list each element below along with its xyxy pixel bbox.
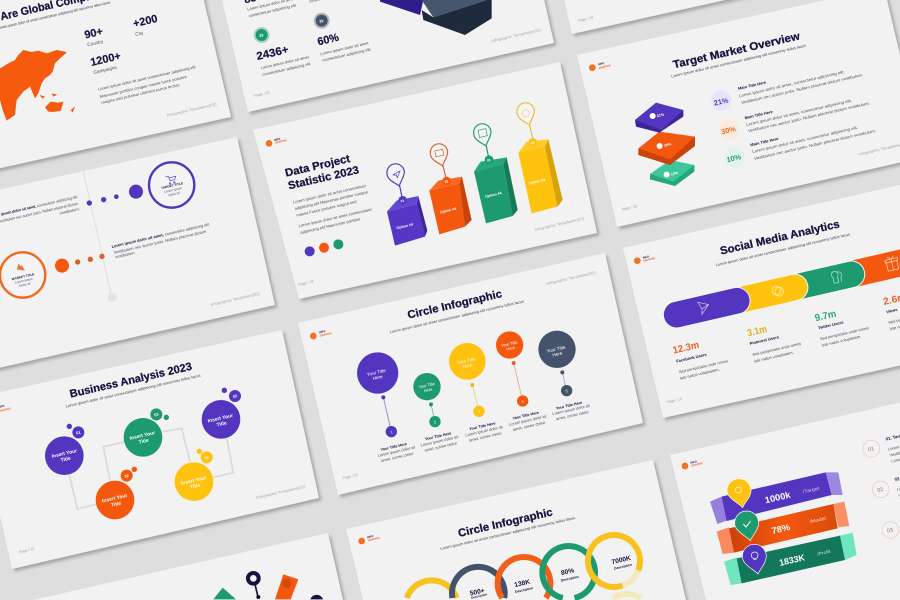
body text: Lorem ipsum dolor sit amet consectetuer [292, 183, 367, 205]
slide: top right fragment [532, 0, 879, 34]
band segment: green [784, 258, 867, 302]
stat text top: consectetuer adipiscing elit [248, 2, 297, 18]
stat: 60% [316, 32, 372, 63]
node 03: 03 [154, 411, 160, 417]
numbered item 01: 01 [868, 446, 875, 453]
stat: 138K [514, 579, 533, 594]
logo: INFO [274, 137, 281, 142]
lollipop 5: 5 [565, 388, 569, 394]
pin: orange: 02 [444, 179, 449, 184]
stat: 500+: Description [471, 592, 488, 600]
page number: Page / 16 [621, 204, 637, 212]
text block 3: Vestibulum nec auctor justo. Nullam placerat dictum vestibulum. [753, 128, 876, 161]
body text: Lorem ipsum dolor sit amet consectetuer [298, 206, 373, 228]
ring: yellow right [588, 535, 640, 587]
pin: navy [246, 571, 261, 599]
bar: green option [474, 157, 518, 223]
stat: views: Views [886, 307, 899, 314]
ribbon: orange [717, 502, 849, 554]
text block: Maecenas porttitor congue massa fusce posuere [99, 74, 188, 99]
text block upper: vestibulum. [59, 206, 80, 216]
slide: social media analytics [623, 178, 900, 418]
lollipop 2: Here [423, 386, 434, 393]
numbered item 03 [882, 522, 899, 538]
caption 4: Your Title Here [512, 411, 539, 421]
lollipop 4 [496, 331, 528, 407]
stat: 138K: Description [515, 586, 533, 594]
heading: data project statistic 2023: Data Project [284, 153, 352, 180]
stat: 90+ country: 90+ [83, 26, 104, 42]
lollipop 5: Your Title [546, 345, 566, 354]
stat: 80% [560, 567, 579, 583]
percent bubble 21% [711, 90, 732, 111]
pin: purple: 01 [400, 199, 405, 203]
caption 1 [377, 442, 416, 463]
logo [310, 329, 332, 339]
lollipop 4: 4 [521, 398, 525, 404]
ribbon: purple [710, 472, 843, 524]
caption 4: Lorem ipsum dolor sit [508, 413, 548, 427]
ring: green [542, 546, 595, 598]
heading: business analysis 2023: Business Analysis 2023 [69, 361, 193, 401]
ribbon: green [724, 533, 857, 585]
icon: paper plane [698, 300, 710, 315]
node 05: 05 [232, 393, 238, 399]
stat: twitter users [814, 309, 869, 348]
lollipop 3: Your Title [456, 356, 477, 365]
logo: INFO [642, 254, 649, 260]
ring: pale yellow [613, 594, 641, 598]
node 01 [45, 424, 84, 475]
lollipop 1: Here [372, 374, 384, 381]
body text [292, 183, 373, 235]
logo [358, 534, 380, 544]
slide: circle infographic rings [346, 460, 686, 600]
footer: Infographic Templates(02) [210, 291, 261, 307]
ring: orange [498, 557, 550, 598]
logo: GRAPHIC [643, 256, 656, 263]
node 03 [124, 408, 169, 457]
icon: slate badge: 29 [319, 19, 324, 24]
footer: Infographic Templates(02) [256, 484, 307, 500]
text block lower: Vestibulum nec auctor justo. Nullam placerat dictum [113, 229, 207, 255]
iso layer: green [650, 160, 694, 186]
stat: 90+ country: Country [87, 39, 104, 47]
icon: gift [884, 255, 900, 271]
stat: twitter users: Sed perspiciatis unde omnis [819, 325, 869, 341]
ribbon: purple: /Target [802, 485, 821, 494]
percent bubble 30%: 30% [720, 124, 737, 136]
text block 2: Vestibulum nec auctor justo. Nullam placerat dictum vestibulum. [747, 100, 870, 133]
lollipop 5: Here [552, 351, 563, 358]
logo: INFO [367, 534, 374, 539]
node 04: Title [189, 483, 201, 491]
target ring: TARGET TITLE [161, 181, 183, 190]
heading: circle infographic: Circle Infographic [457, 506, 554, 540]
slide: ribbons with pins [670, 385, 900, 600]
text block lower: vestibulum. [115, 250, 136, 259]
iso layer: orange: 30% [664, 142, 673, 148]
ring: yellow left [407, 580, 457, 598]
icon: people [831, 270, 843, 284]
logo [266, 137, 287, 147]
pin: yellow: 04 [531, 141, 535, 145]
logo [589, 61, 611, 71]
segmented band [661, 233, 900, 331]
target ring [149, 162, 194, 208]
text block [97, 64, 197, 105]
stat: 60%: Lorem ipsum dolor sit amet [320, 40, 370, 56]
numbered item 01 [863, 432, 900, 464]
diamond: green [213, 588, 236, 599]
bar: orange [275, 574, 298, 599]
percent bubble 30% [719, 119, 739, 140]
node 05 [202, 388, 241, 439]
stat: facebook users: iste natus voluptatem. [679, 367, 720, 381]
band segment: yellow [722, 271, 811, 316]
pin: green: 03 [487, 158, 491, 163]
stat: twitter users: Twitter Users [817, 319, 845, 330]
logo: GRAPHIC [274, 138, 287, 145]
stat: facebook users [672, 340, 728, 381]
numbered item 02: 02 [877, 487, 884, 494]
lollipop 3: Here [462, 362, 474, 369]
stat: pinterest users [746, 324, 802, 364]
node 02: Title [110, 501, 122, 509]
page number: Page / 14 [577, 16, 593, 23]
pin: yellow [517, 103, 537, 147]
slide: global company world map [0, 0, 231, 185]
footer: Infographic Templates(02) [534, 216, 585, 232]
caption 3: Lorem ipsum dolor sit [465, 424, 504, 438]
ribbon: green: 1833K [778, 552, 806, 568]
caption 1: Your Title Here [380, 442, 407, 452]
stat: facebook users: Sed perspiciatis unde omnis [678, 358, 728, 374]
caption 5 [552, 401, 591, 421]
icon: slate badge [314, 13, 330, 29]
logo [634, 254, 656, 264]
caption 2: Lorem ipsum dolor sit [420, 434, 459, 448]
stat: pinterest users: iste natus voluptatem. [753, 350, 794, 364]
lollipop 3 [449, 343, 486, 417]
stat: facebook users: 12.3m [672, 340, 700, 357]
stat: 1200+ campaigns: 1200+ [89, 50, 122, 69]
icon: green badge [254, 27, 270, 43]
market ring: Dolor sit [19, 281, 31, 288]
node 02: Insert Your [102, 493, 128, 505]
lollipop 4: Your Title [501, 339, 519, 348]
iso layer: green: 10% [670, 171, 679, 176]
small icon circles [305, 239, 343, 256]
stat: 2436+ [255, 44, 312, 77]
orange connector dots [55, 254, 105, 273]
iso layer: purple [635, 103, 683, 133]
stat: 60%: consectetuer adipiscing elit [322, 46, 372, 63]
caption 3: amet, conse ctetur [469, 430, 503, 443]
target ring: Dolor sit [168, 191, 180, 197]
stat: pinterest users: Sed perspiciatis unde omnis [752, 341, 802, 357]
pin: purple [742, 544, 766, 574]
node 01: Title [60, 456, 72, 464]
stat: pinterest users: 3.1m [746, 324, 768, 339]
market ring: MARKET TITLE [11, 272, 35, 281]
stat: 7000K [611, 555, 632, 571]
caption 5: Lorem ipsum dolor sit [552, 403, 591, 416]
subtitle: Lorem ipsum dolor sit amet consectetuer adipiscing elit nonummy tellus lacus [715, 232, 850, 267]
iso layer: orange [638, 132, 695, 165]
caption 2: Your Title Here [425, 431, 452, 441]
subtitle: Lorem ipsum dolor sit amet consectetuer adipiscing elit nonummy tellus lacus [671, 44, 807, 79]
caption 3 [465, 421, 504, 443]
stat: pinterest users: Pinterest Users [749, 334, 780, 346]
node 05: Insert Your [207, 413, 234, 425]
icon: green badge: 29 [259, 33, 264, 38]
node 01: 01 [76, 429, 82, 435]
pin: yellow [727, 479, 751, 508]
subtitle: Lorem ipsum dolor sit amet consectetuer adipiscing elit nonummy tellus lacus [389, 299, 524, 334]
percent bubble 21%: 21% [713, 95, 730, 108]
world map [0, 50, 75, 121]
caption 4 [508, 411, 548, 432]
subtitle: Lorem ipsum dolor sit amet consectetuer adipiscing elit nonummy tellus lacus [440, 516, 576, 551]
market ring: Lorem ipsum [14, 277, 33, 285]
text block 3: Main Title Here [750, 136, 780, 147]
stat: 7000K: Description [614, 563, 632, 571]
stat: 138K: 138K [514, 579, 531, 589]
bar: yellow option [518, 139, 563, 213]
bar: purple option [387, 196, 427, 246]
body text: massa Fusce posuere magna sed [296, 199, 357, 218]
pin: orange [430, 144, 451, 185]
logo: GRAPHIC [319, 331, 332, 338]
body text: adipiscing elit Maecenas porttitor congue [294, 189, 369, 211]
text block: magna sed pulvinar ultricies purus lectus [101, 82, 180, 105]
connector lines [69, 428, 233, 509]
text block 1: Vestibulum nec auctor justo. Nullam placerat dictum vestibulum. [741, 72, 864, 105]
slide: bottom left fragment [33, 533, 343, 600]
page number: Page / 18 [298, 280, 314, 287]
pin: green [735, 511, 759, 541]
stat: twitter users: 9.7m [814, 309, 838, 324]
ring: slate [452, 567, 505, 598]
timeline axis [83, 172, 117, 302]
caption 4: amet, conse ctetur [512, 420, 546, 432]
footer: Infographic Templates(02) [491, 28, 542, 43]
text block 2: Lorem ipsum dolor sit amet, consectetur adipiscing elit. [746, 98, 852, 127]
text block 3: Lorem ipsum dolor sit amet, consectetur adipiscing elit. [752, 125, 858, 154]
ribbon: purple: 1000k [764, 490, 791, 505]
slide: target market overview [577, 0, 900, 227]
stat: twitter users: iste natus voluptatem. [821, 334, 862, 348]
node 02 [96, 467, 137, 519]
lollipop 1: Your Title [366, 368, 387, 377]
stat: 80%: Description [560, 575, 579, 583]
caption 2 [420, 431, 459, 453]
text block lower: Lorem ipsum dolor sit amet, consectetur adipiscing elit [111, 221, 211, 249]
slide: top centre statistics [208, 0, 554, 112]
stat: 2436+: consectetuer adipiscing elit [262, 61, 312, 77]
caption 2: amet, conse ctetur [424, 440, 458, 453]
numbered item 02 [872, 473, 900, 498]
logo: INFO [598, 61, 605, 66]
lollipop 2: Your Title [418, 381, 436, 389]
bar: purple option: Option #4 [396, 222, 414, 230]
pin: purple [387, 164, 407, 205]
bar: green option: Option #4 [485, 191, 503, 199]
logo fragment [0, 404, 11, 413]
text block 2: Main Title Here [744, 109, 774, 120]
page number: Page / 12 [19, 547, 35, 554]
iso layer: purple: 21% [656, 112, 665, 118]
page number: Page / 16 [342, 473, 358, 480]
logo: GRAPHIC [367, 536, 380, 542]
footer: Infographic Templates(02) [546, 270, 597, 286]
lollipop 1 [357, 352, 398, 437]
stat: views [882, 292, 900, 331]
target ring: Lorem ipsum [164, 186, 183, 194]
caption 5: Your Title Here [556, 401, 583, 411]
pin: green [474, 124, 493, 164]
text block 1: Lorem ipsum dolor sit amet, consectetur adipiscing elit. [738, 69, 845, 98]
logo: INFO [319, 329, 326, 334]
3D block stack [380, 0, 492, 35]
bar: orange option: Option #4 [439, 207, 458, 215]
bar: yellow option: Option #4 [528, 178, 547, 186]
page number: Page / 14 [666, 397, 682, 404]
purple connector dots [87, 185, 143, 206]
lollipop 5 [538, 331, 576, 396]
lollipop 3: 3 [477, 409, 481, 414]
node 04: 04 [204, 454, 210, 460]
percent bubble 10% [724, 147, 745, 168]
body text: adipiscing elit Maecenas porttitor [300, 216, 362, 235]
node 01: Insert Your [51, 448, 78, 460]
heading: data project statistic 2023: Statistic 2023 [287, 164, 360, 192]
lollipop 2 [413, 373, 441, 427]
ribbon: orange: /Model [809, 516, 826, 524]
caption 1: Lorem ipsum dolor sit [377, 444, 416, 458]
node 04 [175, 449, 213, 501]
numbered item 03: 03 [887, 527, 894, 535]
stat: 2436+: 2436+ [255, 44, 290, 63]
stat: 500+: 500+ [469, 587, 486, 598]
lollipop 2: 2 [433, 419, 437, 425]
text block upper: Vestibulum nec auctor justo. Nullam placerat dictum [0, 201, 79, 224]
slide: circle infographic lollipops [298, 253, 643, 495]
subtitle: Lorem ipsum dolor sit amet consectetuer adipiscing elit nonummy tellus lacus [65, 374, 201, 409]
slide: timeline with target and market circles [0, 137, 275, 375]
band segment: purple [661, 285, 753, 331]
stat: 7000K: 7000K [611, 555, 632, 566]
caption 1: amet, conse ctetur [381, 451, 415, 463]
text block: Lorem ipsum dolor sit amet consectetuer adipiscing elit [97, 64, 197, 92]
logo: GRAPHIC [691, 461, 704, 468]
heading: data project statistic 2023 [284, 153, 360, 192]
ribbon: orange: 78% [771, 522, 791, 536]
stat: 1200+ campaigns: Campaigns [93, 65, 118, 75]
node 03: Title [138, 438, 150, 446]
node 02: 02 [124, 473, 130, 479]
slide: data project statistic [253, 62, 597, 299]
stat: 80%: 80% [560, 567, 575, 577]
logo: GRAPHIC [598, 63, 611, 70]
heading: circle infographic: Circle Infographic [406, 288, 503, 322]
bar: orange option [429, 177, 472, 234]
icon: circles [771, 285, 784, 297]
stat: 2436+: Lorem ipsum dolor sit amet [260, 54, 310, 70]
heading: social media analytics: Social Media Analytics [719, 218, 841, 258]
node 05: Title [216, 420, 228, 428]
lollipop 1: 1 [390, 429, 394, 435]
stat: 60%: 60% [316, 32, 340, 48]
footer: Infographic Templates(02) [167, 102, 218, 118]
stat: +200 city: +200 [132, 13, 159, 30]
percent bubble 10%: 10% [726, 152, 742, 164]
logo [682, 459, 704, 469]
ribbon: green: /Profit [817, 549, 832, 557]
stat: facebook users: Facebook Users [676, 352, 708, 364]
market ring [0, 252, 45, 298]
caption 3: Your Title Here [469, 421, 496, 431]
lollipop 4: Here [506, 345, 516, 352]
logo: INFO [690, 459, 697, 465]
band segment: orange [843, 233, 900, 289]
pin: navy right [310, 595, 323, 599]
page number: Page / 19 [254, 91, 270, 98]
node 04: Insert Your [180, 475, 207, 487]
stat: +200 city: City [135, 30, 144, 37]
slide: business analysis 2023 [0, 330, 319, 569]
node 03: Insert Your [129, 430, 156, 442]
stat text top [247, 0, 330, 18]
caption 5: amet, conse ctetur [556, 409, 590, 421]
text block 1: Main Title Here [737, 79, 767, 91]
heading: target market overview: Target Market Overview [672, 30, 801, 71]
